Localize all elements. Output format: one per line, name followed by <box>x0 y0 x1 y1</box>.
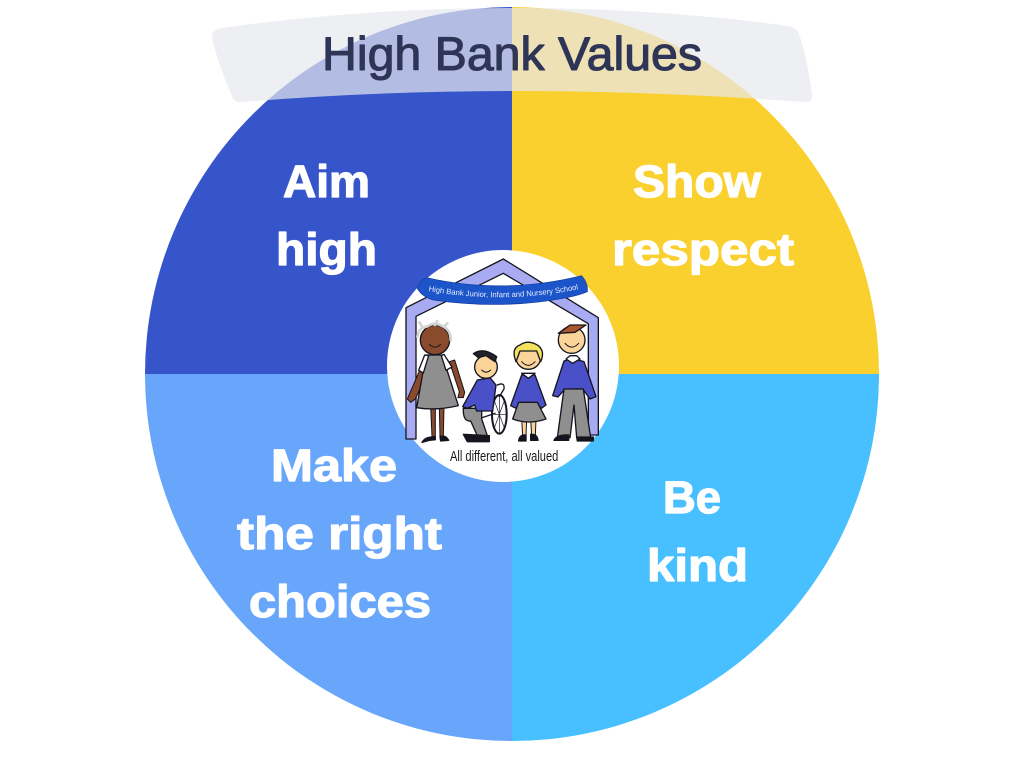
panel: be kind quadrant <box>512 374 879 741</box>
value label: make the right choices: choices <box>249 576 431 627</box>
ribbon text: High Bank Junior, Infant and Nursery School <box>429 284 578 298</box>
figure: girl with glasses <box>511 342 546 441</box>
figure: boy in wheelchair <box>463 351 507 442</box>
values wheel <box>145 7 879 741</box>
tagline: All different, all valued <box>450 449 558 465</box>
value label: be kind: kind <box>647 540 748 591</box>
value label: make the right choices: Make <box>271 440 397 491</box>
value label: be kind: Be <box>663 472 721 523</box>
icon: house outline <box>406 259 598 439</box>
value label: aim high <box>276 156 377 275</box>
panel: aim high quadrant <box>145 7 512 374</box>
title: High Bank Values <box>322 27 702 80</box>
figure: girl in grey dress <box>407 321 465 442</box>
title banner <box>212 8 812 102</box>
figure: tall boy <box>553 325 596 441</box>
value label: show respect: respect <box>612 224 794 275</box>
school logo <box>387 250 619 482</box>
logo artwork <box>405 258 599 465</box>
ribbon text baseline <box>428 289 580 297</box>
panel: show respect quadrant <box>512 7 879 374</box>
logo white disc <box>387 250 619 482</box>
value label: aim high: high <box>276 224 377 275</box>
value label: show respect: Show <box>633 156 762 207</box>
value label: be kind <box>647 472 748 591</box>
icon: school ribbon <box>417 276 587 304</box>
panel: make the right choices quadrant <box>145 374 512 741</box>
value label: make the right choices <box>237 440 442 627</box>
value label: aim high: Aim <box>283 156 370 207</box>
icon: wheelchair wheel <box>492 395 507 434</box>
value label: make the right choices: the right <box>237 508 442 559</box>
value label: show respect <box>612 156 794 275</box>
